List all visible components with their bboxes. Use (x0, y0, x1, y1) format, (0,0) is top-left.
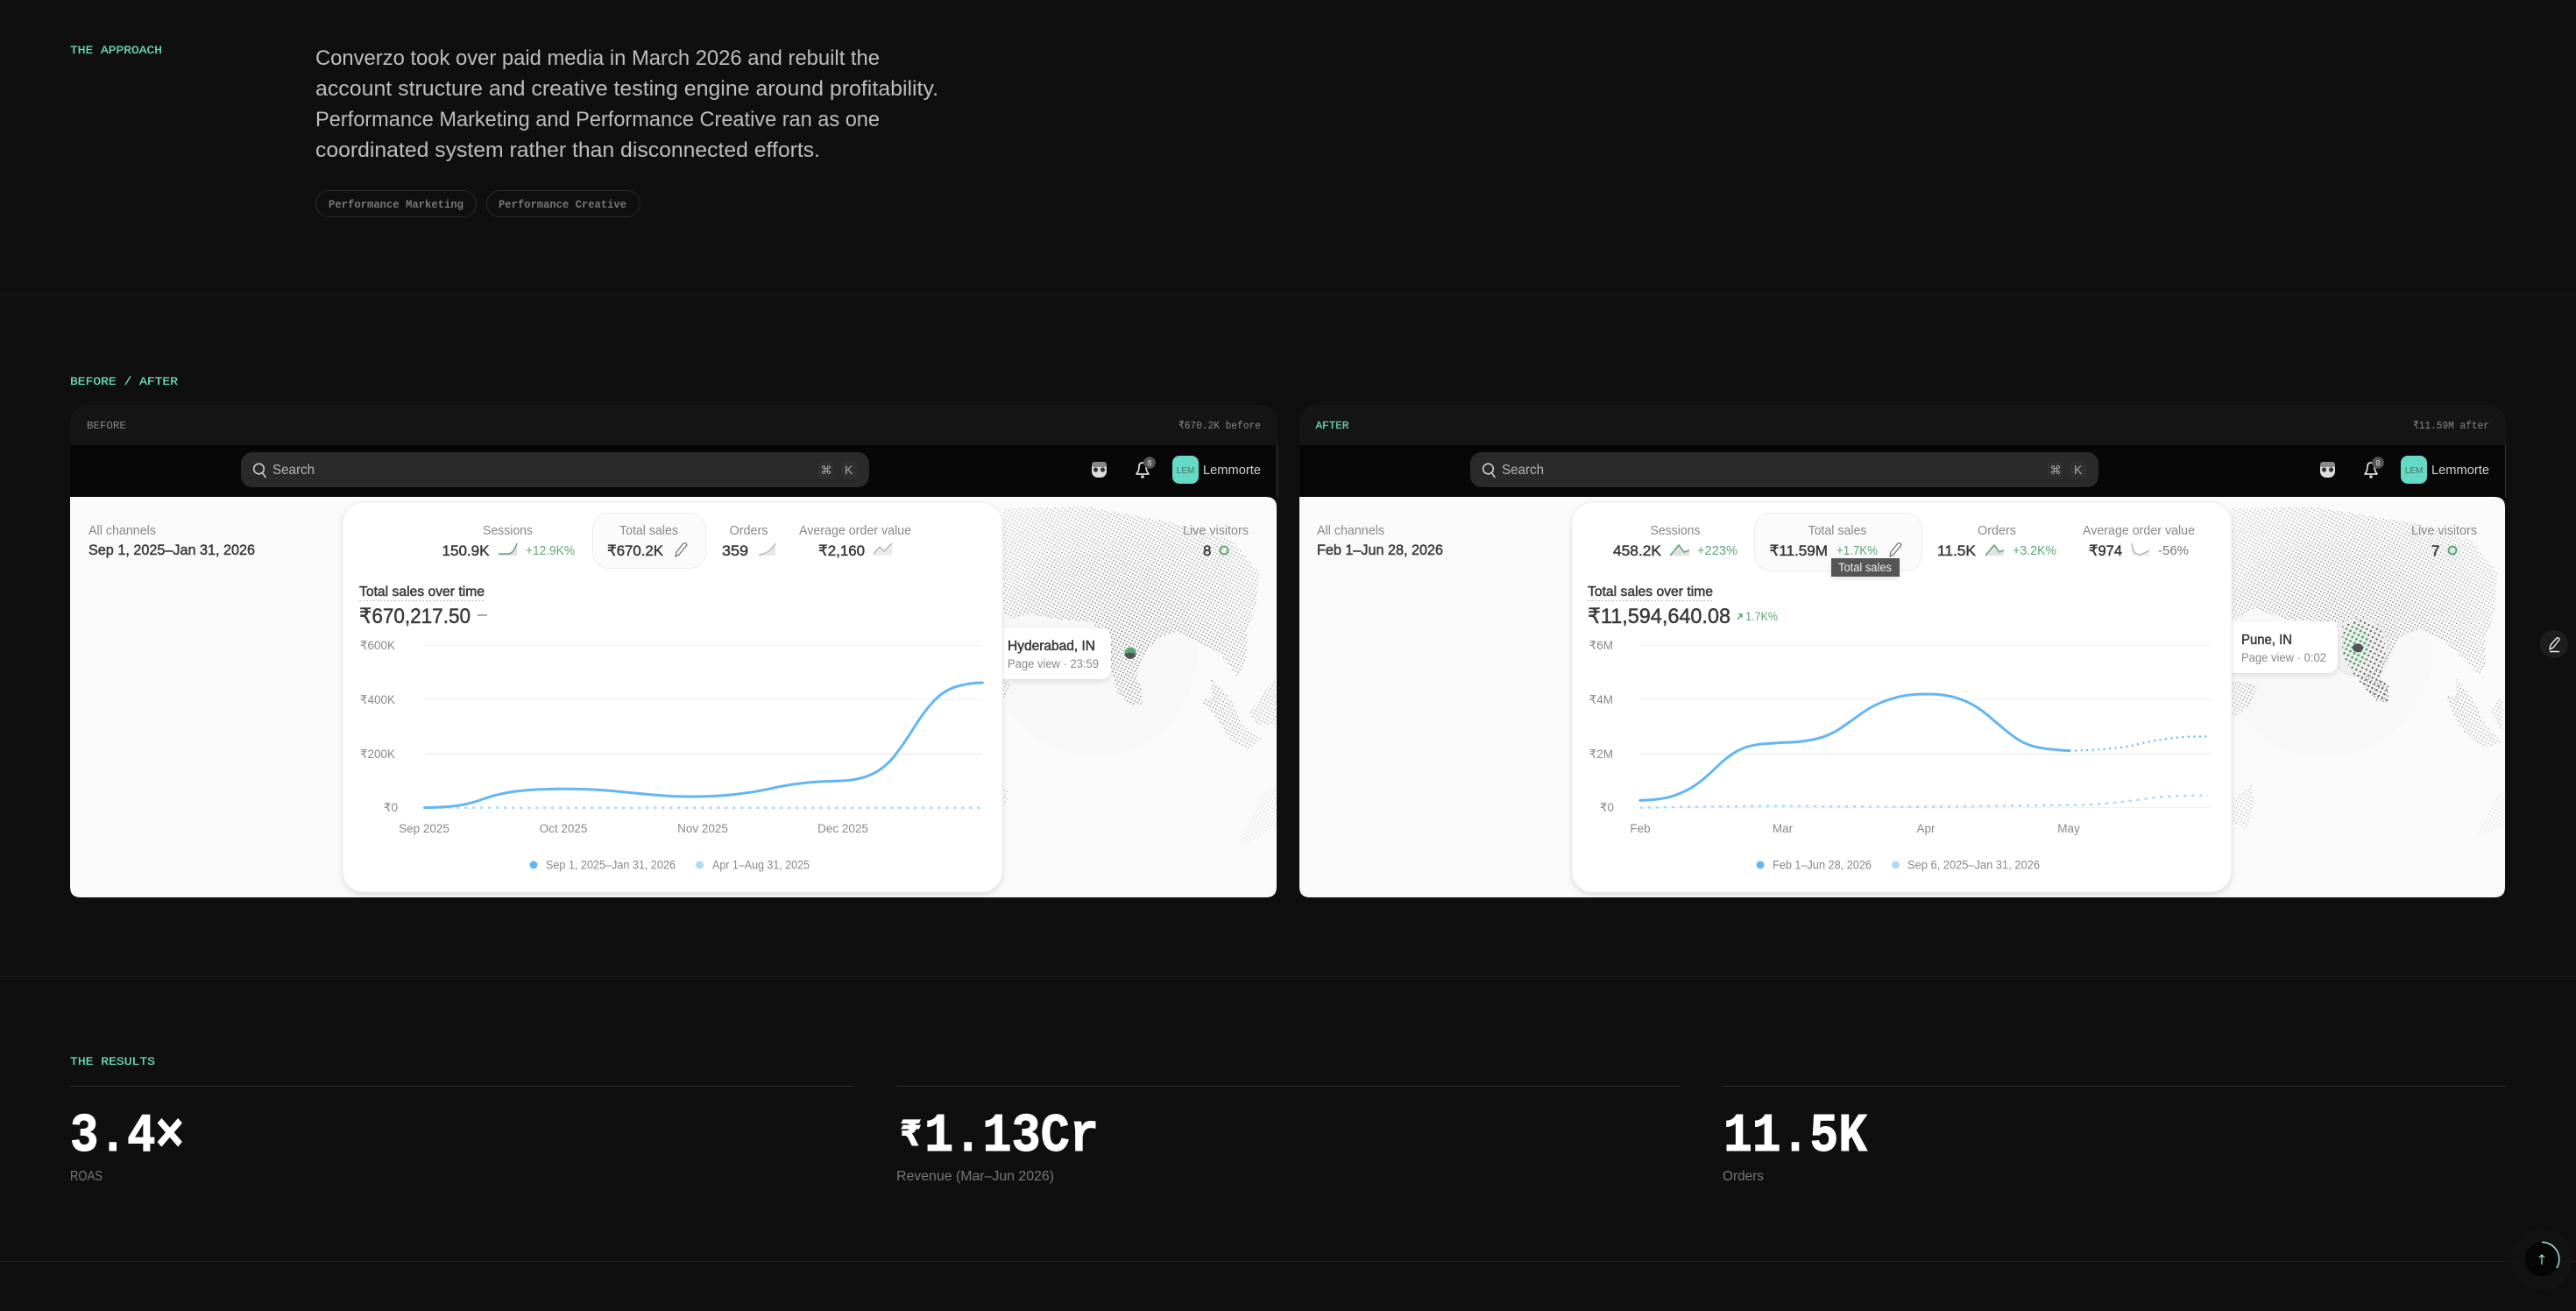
line chart: before: ₹600K (360, 639, 395, 652)
search bar: K (845, 463, 853, 477)
metric: orders: +3.2K% (2013, 543, 2056, 558)
metric: average order value: ₹2,160 (818, 542, 865, 559)
metric: roas: ROAS (70, 1169, 103, 1184)
metric: orders: 11.5K (1937, 542, 1977, 559)
icon: bell with badge: 8 (1147, 459, 1152, 468)
live visitors: Live visitors (2411, 523, 2477, 538)
floating edit button (2540, 630, 2568, 658)
line chart: after: Apr (1916, 822, 1936, 835)
metric: total sales (1754, 514, 1922, 571)
line chart: after: ₹4M (1589, 693, 1613, 706)
metric: sessions (442, 523, 575, 559)
location tooltip: pune (2226, 622, 2338, 673)
live visitors: 7 (2431, 542, 2439, 559)
metric: revenue: ₹ (900, 1117, 922, 1157)
live visitors: 8 (1203, 542, 1211, 559)
search bar: ⌘ (820, 464, 832, 477)
channel and date range: All channels (1317, 523, 1384, 538)
approach paragraph (315, 46, 938, 162)
eyebrow: before / after: BEFORE / AFTER (70, 375, 178, 388)
account avatar and name (2401, 456, 2489, 484)
metric: orders (1722, 1086, 2506, 1184)
line chart: after: Sep 6, 2025–Jan 31, 2026 (1907, 859, 2040, 871)
location tooltip: hyderabad (990, 628, 1111, 679)
line chart: before: ₹0 (384, 801, 398, 814)
account avatar and name: LEM (2405, 466, 2423, 476)
line chart: after: ₹6M (1589, 639, 1613, 652)
line chart: before (360, 639, 982, 871)
live visitors (2411, 523, 2477, 559)
line chart: before: ₹400K (360, 693, 395, 706)
approach paragraph: Converzo took over paid media in March 2026 and rebuilt the (315, 46, 880, 70)
metric: total sales: ₹670.2K (607, 542, 664, 559)
eyebrow: the approach: THE APPROACH (70, 44, 162, 57)
line chart: after: ₹0 (1600, 801, 1614, 814)
metric: average order value (799, 523, 911, 559)
line chart: before: Sep 2025 (399, 822, 449, 835)
search bar: K (2074, 463, 2083, 477)
back to top button (2511, 1229, 2572, 1290)
metric: average order value: ₹974 (2089, 542, 2122, 559)
line chart: after: Feb (1630, 822, 1651, 835)
icon: mask (2320, 462, 2335, 478)
search bar (241, 452, 869, 487)
before header value: ₹670.2K before (1178, 420, 1261, 432)
tag: performance creative (487, 191, 640, 217)
metric: average order value: Average order value (799, 523, 911, 538)
icon: bell with badge (1136, 457, 1156, 478)
location tooltip: hyderabad: Hyderabad, IN (1008, 639, 1095, 654)
metric: orders: 11.5K (1723, 1105, 1868, 1167)
world map dots (2217, 507, 2504, 835)
metric: sessions: +223% (1697, 543, 1737, 558)
location tooltip: hyderabad: Page view · 23:59 (1008, 657, 1099, 670)
section: the approach (70, 44, 938, 217)
metric: total sales: Total sales (1808, 523, 1866, 538)
eyebrow: the results: THE RESULTS (70, 1055, 155, 1068)
line chart: before: ₹200K (360, 748, 395, 761)
search bar (1470, 452, 2098, 487)
metric: orders: 359 (722, 542, 748, 559)
tag: performance creative: Performance Creative (499, 199, 626, 211)
metric: roas: 3.4× (70, 1105, 184, 1167)
account avatar and name: LEM (1177, 466, 1194, 476)
line chart: after: May (2057, 822, 2080, 835)
metric: revenue (896, 1086, 1681, 1184)
metric: total sales: Total sales (619, 523, 678, 538)
metric: orders: Orders (1723, 1169, 1764, 1184)
line chart: before: Nov 2025 (677, 822, 728, 835)
metric: orders (1937, 523, 2056, 559)
line chart: after: Feb 1–Jun 28, 2026 (1773, 859, 1872, 871)
search bar: ⌘ (2050, 464, 2061, 477)
after header value: ₹11.59M after (2413, 420, 2489, 432)
line chart: before: Dec 2025 (817, 822, 868, 835)
metric: average order value: -56% (2158, 543, 2189, 558)
line chart: after: ₹2M (1589, 748, 1613, 761)
location tooltip: pune: Pune, IN (2241, 633, 2292, 648)
metric: orders: Orders (729, 523, 768, 538)
metric: total sales: ₹11.59M (1770, 542, 1828, 559)
dashboard body (70, 497, 1277, 897)
metric: sessions: Sessions (1651, 523, 1700, 538)
location tooltip: pune: Page view · 0:02 (2241, 651, 2326, 664)
metric: roas (70, 1086, 854, 1184)
tag: performance marketing (315, 191, 477, 217)
account avatar and name (1172, 456, 1261, 484)
metric: sessions (1613, 523, 1737, 559)
icon: bell with badge: 8 (2375, 459, 2381, 468)
metric: sessions: 458.2K (1613, 542, 1662, 559)
approach paragraph: Performance Marketing and Performance Creative ran as one (315, 108, 880, 131)
chart card (1572, 502, 2232, 892)
panel: before dashboard (70, 405, 1277, 898)
channel and date range: Feb 1–Jun 28, 2026 (1317, 542, 1443, 558)
line chart: after: Mar (1773, 822, 1794, 835)
metric: average order value (2083, 523, 2195, 559)
account avatar and name: Lemmorte (1203, 463, 1261, 478)
icon: bell with badge (2365, 457, 2384, 478)
line chart: after (1589, 639, 2211, 871)
section: the results (70, 1055, 2506, 1184)
metric: average order value: Average order value (2083, 523, 2195, 538)
total value and change: 1.7K% (1745, 609, 1778, 623)
live visitors: Live visitors (1183, 523, 1249, 538)
icon: mask (1092, 462, 1107, 478)
hover tooltip: total sales: Total sales (1838, 561, 1892, 574)
chart title: Total sales over time (1588, 585, 1713, 599)
metric: orders: Orders (1978, 523, 2016, 538)
total value and change: ₹11,594,640.08 (1588, 605, 1730, 628)
total value: ₹670,217.50 (359, 605, 471, 628)
approach paragraph: account structure and creative testing engine around profitability. (315, 77, 938, 101)
line chart: before: Sep 1, 2025–Jan 31, 2026 (546, 859, 676, 871)
live visitors (1183, 523, 1249, 559)
search bar: Search (1502, 463, 1544, 478)
metric: sessions: 150.9K (442, 542, 490, 559)
metric: revenue: 1.13Cr (924, 1105, 1099, 1167)
after header label: AFTER (1316, 420, 1349, 432)
line chart: before: Oct 2025 (540, 822, 587, 835)
account avatar and name: Lemmorte (2431, 463, 2489, 478)
before header label: BEFORE (87, 420, 126, 432)
search bar: Search (272, 463, 315, 478)
metric: sessions: Sessions (483, 523, 533, 538)
tag: performance marketing: Performance Marketing (329, 199, 464, 211)
channel and date range (1317, 523, 1443, 558)
channel and date range (88, 523, 255, 558)
channel and date range: All channels (88, 523, 156, 538)
channel and date range: Sep 1, 2025–Jan 31, 2026 (88, 542, 255, 558)
metric: sessions: +12.9K% (526, 543, 575, 558)
metric: total sales: +1.7K% (1836, 543, 1878, 558)
metric: revenue: Revenue (Mar–Jun 2026) (896, 1169, 1054, 1184)
dashboard body (1299, 497, 2505, 897)
line chart: before: Apr 1–Aug 31, 2025 (712, 859, 810, 871)
chart title: Total sales over time (359, 585, 485, 599)
metric: orders (722, 523, 775, 559)
hover tooltip: total sales (1831, 558, 1900, 577)
panel: after dashboard (1299, 405, 2506, 898)
approach paragraph: coordinated system rather than disconnected efforts. (315, 138, 820, 162)
metric: total sales (592, 514, 706, 568)
world map dots (993, 507, 1277, 844)
chart card (343, 502, 1002, 892)
